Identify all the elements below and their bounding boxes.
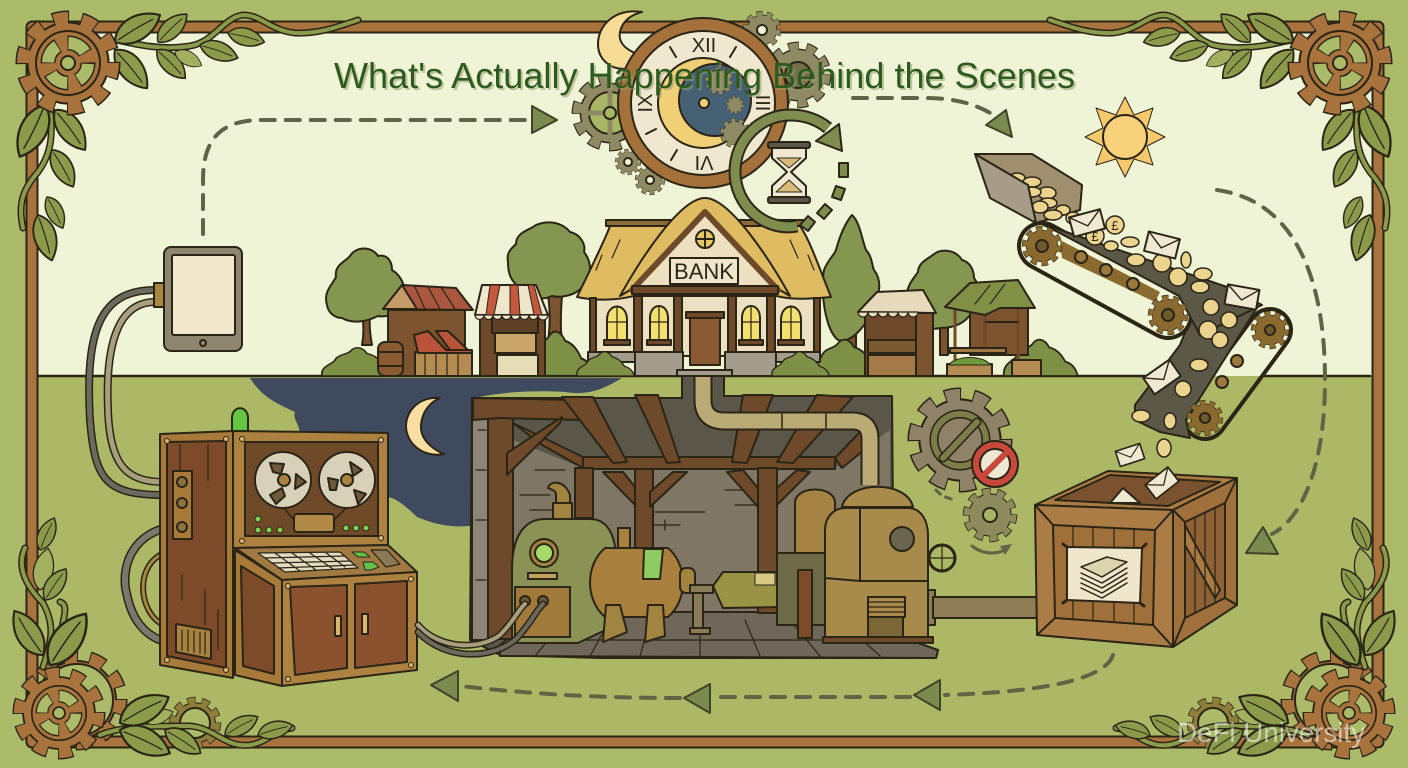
windows: [607, 306, 801, 340]
clock face: VI: [695, 151, 713, 173]
title: What's Actually Happening Behind the Scenes: [336, 57, 1077, 98]
icon: clock gears: [577, 14, 826, 193]
floor: [500, 612, 938, 658]
upper conveyor: [1025, 222, 1262, 335]
coins: [1086, 216, 1237, 429]
market stall 2: [475, 285, 548, 376]
icon: night crescent moon: [406, 398, 444, 455]
shed walls: [470, 376, 938, 658]
dashed arrow: conveyor to crate: [1217, 190, 1325, 554]
coins: £: [1091, 229, 1099, 244]
console top: [235, 545, 417, 580]
icon: paper stack: [1081, 557, 1127, 598]
market stall 4: [945, 280, 1041, 376]
dashed arrow: tablet to clock: [203, 106, 557, 234]
title: What's Actually Happening Behind the Scenes: [334, 55, 1075, 96]
bank building: [577, 198, 831, 376]
timber frame: [473, 395, 870, 639]
barrel: [378, 342, 403, 376]
crate: [1035, 439, 1237, 647]
clock assembly: [577, 11, 826, 193]
icon: hourglass with cycle arrow: [735, 115, 848, 231]
icon: crescent moon behind clock: [598, 11, 642, 69]
dashed arrows: crate back to machine: [431, 655, 1113, 713]
envelopes: [1069, 209, 1259, 394]
icon: hopper: [975, 154, 1082, 224]
cables from console to generator: [418, 604, 543, 654]
cabinet side: [160, 431, 233, 678]
generator: [512, 483, 616, 643]
watermark: DeFi University: [1177, 717, 1365, 748]
corner ornament: bottom right: [1113, 515, 1404, 764]
crate side: [1173, 478, 1237, 647]
icon: blocked gears: [915, 395, 1018, 555]
tablet and cables: [89, 247, 242, 640]
crate top rim: [1035, 471, 1237, 510]
envelope in crate: [1110, 488, 1140, 503]
green beacon: [232, 408, 248, 431]
icon: tablet: [154, 247, 242, 351]
falling envelopes and coin: [1115, 439, 1179, 499]
server console machine: [160, 408, 417, 686]
lower cabinet: [235, 550, 282, 686]
crate front: [1035, 505, 1173, 647]
icon: sun: [1085, 97, 1165, 177]
lower conveyor: [1135, 300, 1286, 438]
trees: [326, 215, 978, 360]
coins: £: [1111, 218, 1119, 233]
corner ornament: top right: [1050, 4, 1399, 263]
pipe: [703, 376, 870, 485]
bank building: BANK: [674, 259, 734, 284]
tape unit: [233, 431, 388, 548]
corner ornament: top left: [9, 4, 358, 263]
corner ornament: bottom left: [4, 515, 295, 764]
dashed arrow: clock to hopper: [853, 98, 1012, 137]
clock face: XII: [692, 35, 716, 57]
market stall 3: [858, 290, 936, 376]
motor: [590, 528, 812, 642]
underground engine room: [470, 376, 955, 658]
village: [322, 198, 1078, 376]
stone base: [635, 352, 776, 376]
conveyors with coins and envelopes: [975, 154, 1286, 438]
night sky patch: [250, 378, 622, 526]
cables: [89, 290, 178, 640]
pipe to crate: [933, 597, 1037, 618]
market stall 1: [383, 285, 473, 376]
door: [690, 318, 720, 365]
clock face: [618, 18, 788, 188]
sign: [670, 258, 738, 284]
clock face: IX: [635, 94, 657, 112]
clock face: III: [751, 95, 773, 111]
boiler: [777, 487, 955, 643]
bushes: [322, 332, 1078, 376]
